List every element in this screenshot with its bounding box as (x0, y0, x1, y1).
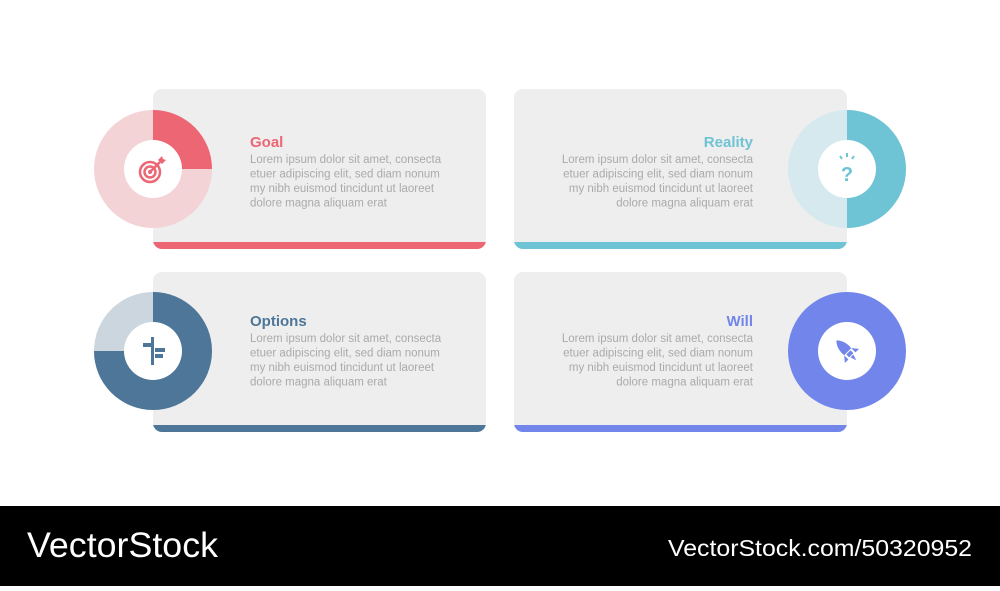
text: will body: my nibh euismod tincidunt ut laoreet (569, 362, 754, 374)
donut: reality: ? (841, 164, 853, 186)
heading: Will: Will (726, 313, 753, 330)
text: reality body: my nibh euismod tincidunt ut laoreet (569, 183, 754, 195)
heading: Reality: Reality (704, 134, 754, 151)
text: will body: Lorem ipsum dolor sit amet, consecta (562, 333, 754, 345)
footer bar (0, 506, 1000, 586)
text: goal body: my nibh euismod tincidunt ut laoreet (250, 183, 435, 195)
text: goal body: Lorem ipsum dolor sit amet, consecta (250, 154, 442, 166)
text: reality body: Lorem ipsum dolor sit amet, consecta (562, 154, 754, 166)
text: options body: dolore magna aliquam erat (250, 376, 388, 388)
panel: reality (514, 89, 906, 249)
text: will body: etuer adipiscing elit, sed diam nonum (563, 348, 753, 360)
text: options body: my nibh euismod tincidunt ut laoreet (250, 362, 435, 374)
heading: Goal: Goal (250, 134, 283, 151)
donut: will (788, 292, 906, 410)
text: options body: Lorem ipsum dolor sit amet, consecta (250, 333, 442, 345)
text: will body: dolore magna aliquam erat (616, 376, 754, 388)
text: reality body: dolore magna aliquam erat (616, 198, 754, 210)
footer url: VectorStock.com/50320952 (668, 535, 972, 561)
text: goal body: etuer adipiscing elit, sed diam nonum (250, 168, 440, 180)
donut: goal (94, 110, 212, 228)
text: options body: etuer adipiscing elit, sed diam nonum (250, 348, 440, 360)
text: reality body: etuer adipiscing elit, sed diam nonum (563, 168, 753, 180)
panel: options (94, 272, 486, 432)
text: goal body: dolore magna aliquam erat (250, 198, 388, 210)
footer logo: VectorStock (27, 526, 219, 565)
panel: goal (94, 89, 486, 249)
heading: Options: Options (250, 313, 307, 330)
panel: will (514, 272, 906, 432)
donut: reality (788, 110, 906, 228)
donut: options (94, 292, 212, 410)
